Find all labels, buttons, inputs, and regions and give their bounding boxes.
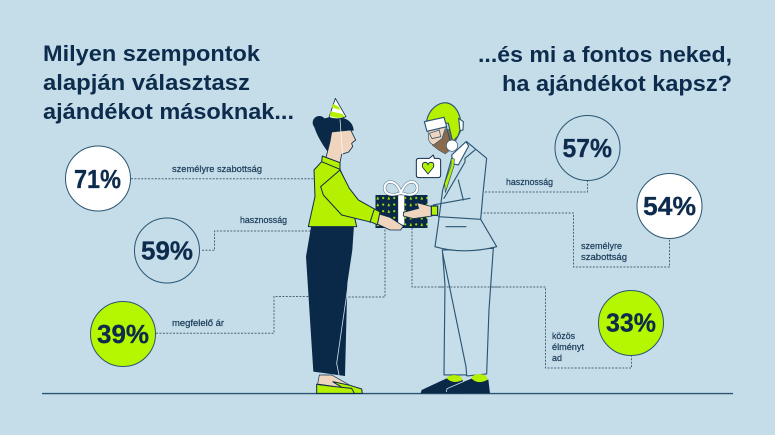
left heading: ajándékot másoknak... (43, 99, 294, 124)
stat: 39% megfelelő ár: 39% (97, 319, 149, 349)
stat: 54% személyre szabottság: 54% (643, 191, 696, 221)
face (428, 126, 446, 145)
stat: 71% személyre szabottság: 71% (74, 164, 121, 194)
hair (314, 117, 354, 151)
face and neck (326, 130, 356, 163)
stat: 57% hasznosság (506, 116, 620, 187)
stat: 54% személyre szabottság: szabottság (581, 252, 627, 262)
stat: 71% személyre szabottság (66, 146, 262, 211)
left heading: Milyen szempontok (43, 41, 261, 66)
stat: 39% megfelelő ár: megfelelő ár (172, 318, 224, 328)
stat: 33% közös élményt ad: élményt (552, 342, 585, 352)
figure: man legs and shoes (421, 248, 493, 393)
stat: 54% személyre szabottság (581, 174, 702, 262)
stat: 57% hasznosság: 57% (562, 133, 612, 163)
stat: 59% hasznosság: 59% (141, 236, 193, 266)
bow outline (384, 182, 418, 195)
man's hand (403, 203, 438, 219)
stat: 33% közös élményt ad: 33% (606, 308, 656, 338)
party hat (329, 98, 346, 119)
jacket (435, 142, 497, 251)
shirt collar (452, 142, 469, 165)
ribbon (398, 195, 404, 225)
stat: 54% személyre szabottság: személyre (581, 241, 622, 251)
woman hand (377, 214, 403, 230)
sweater body (308, 156, 357, 227)
baseline floor (42, 393, 733, 395)
gift box (376, 182, 428, 228)
stat: 57% hasznosság: hasznosság (506, 177, 553, 187)
dotted connector lines (131, 179, 670, 368)
stat: 59% hasznosság: hasznosság (240, 215, 287, 225)
stat: 33% közös élményt ad: ad (552, 353, 562, 363)
dotted connector over man's legs (440, 286, 500, 288)
sleeve (433, 198, 481, 219)
figure: woman upper body (308, 98, 403, 230)
stat: 33% közös élményt ad (552, 290, 664, 363)
hat elastic (340, 119, 343, 155)
hair bun (313, 116, 326, 129)
bow (384, 182, 418, 195)
sweater arm (321, 170, 380, 225)
right heading: ...és mi a fontos neked, (478, 42, 732, 67)
stat: 71% személyre szabottság: személyre szabottság (172, 164, 262, 174)
heart bubble (416, 155, 441, 178)
left heading: alapján választasz (43, 70, 250, 95)
right heading (478, 42, 732, 96)
watch (431, 206, 438, 215)
figure: man upper body (416, 103, 497, 251)
hat pompom (446, 140, 458, 151)
stat: 59% hasznosság (134, 215, 287, 283)
figure: woman trousers and shoes (306, 225, 362, 393)
glasses (429, 130, 441, 139)
jacket details (444, 150, 475, 227)
beard and hair (432, 129, 461, 154)
santa hat (427, 103, 461, 142)
right heading: ha ajándékot kapsz? (502, 71, 732, 96)
stat: 39% megfelelő ár (90, 302, 224, 366)
tie (445, 158, 454, 193)
left heading (43, 41, 294, 124)
stat: 33% közös élményt ad: közös (552, 331, 575, 341)
